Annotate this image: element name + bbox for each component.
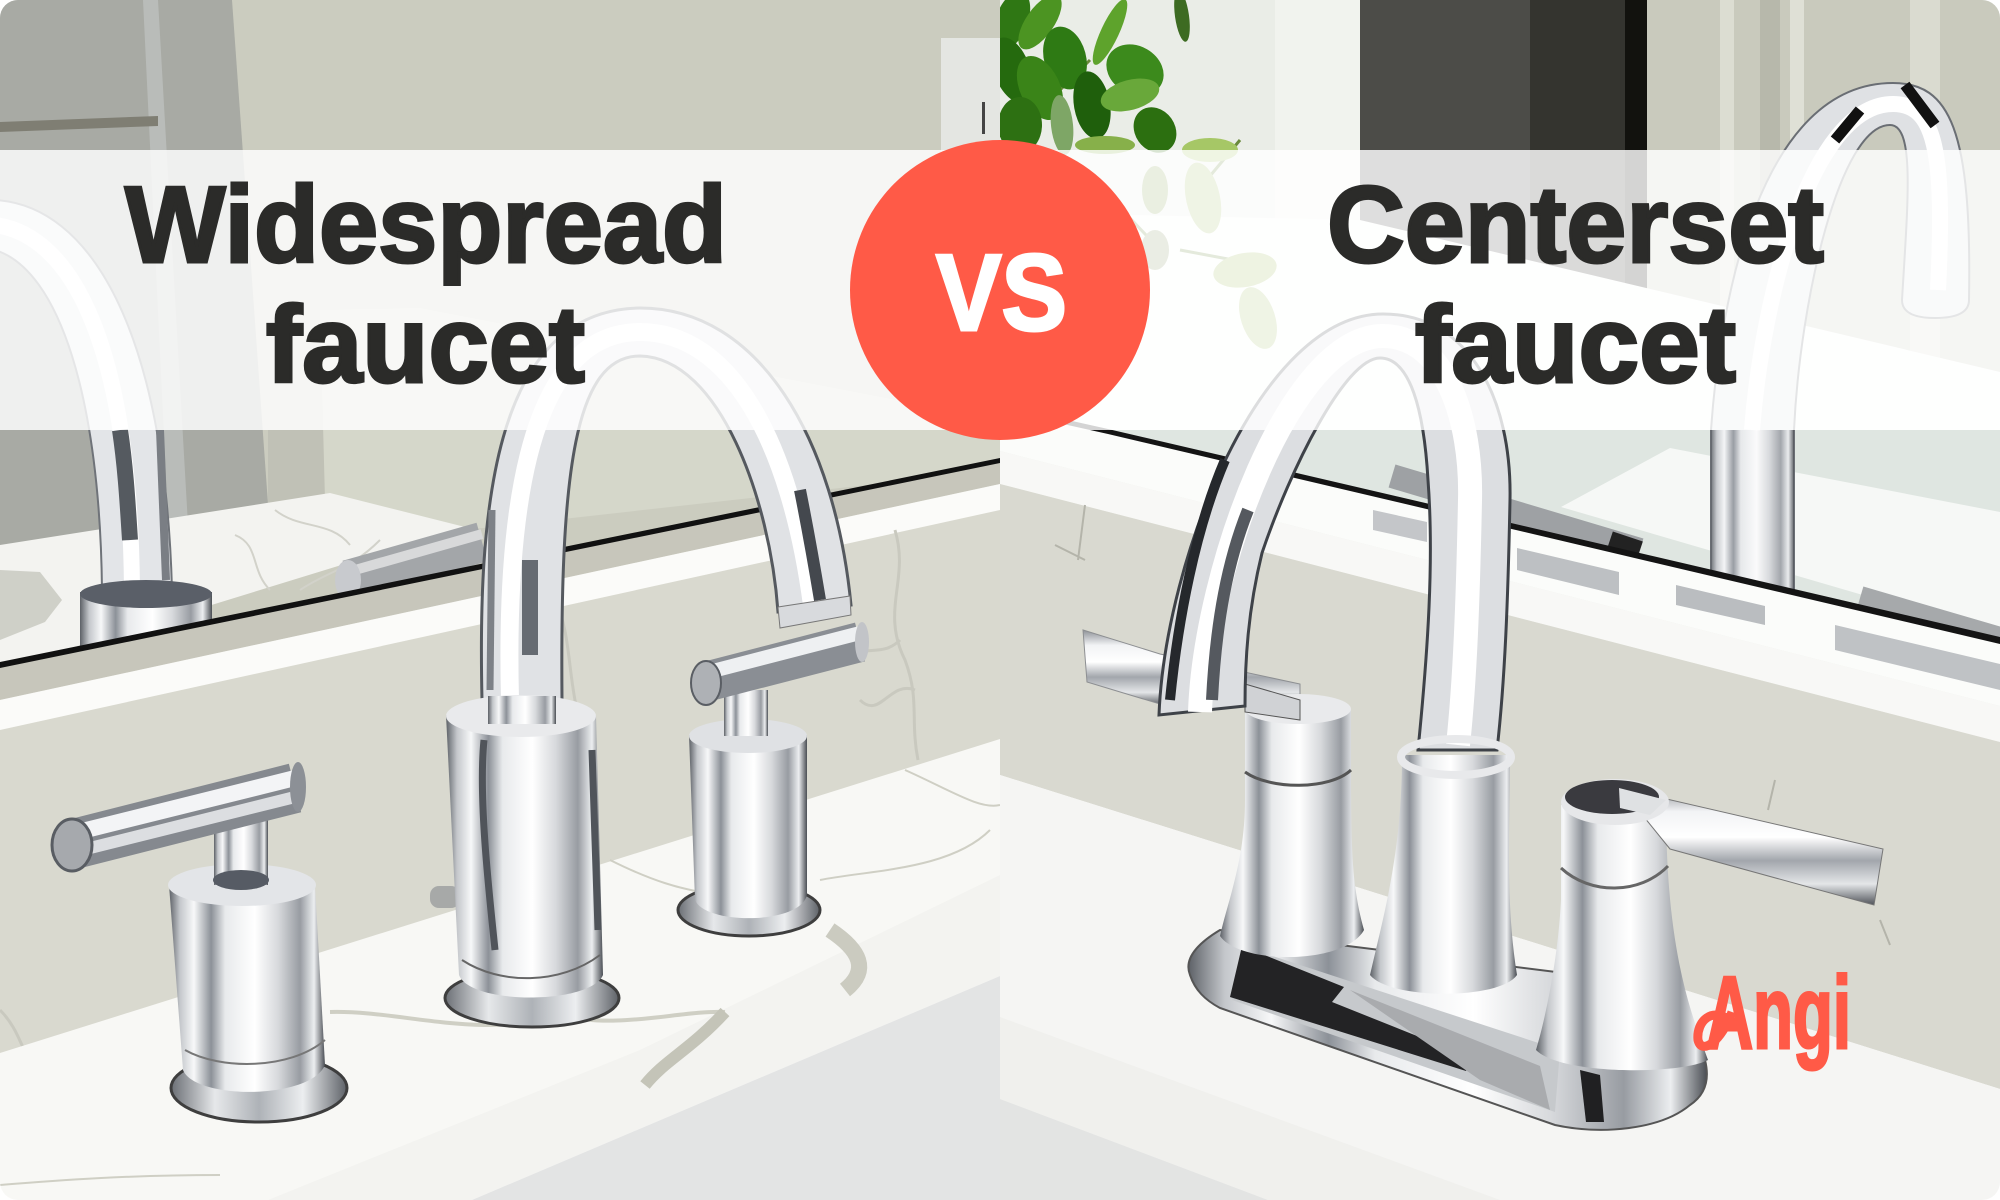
countertop [1000, 775, 2000, 1200]
cabinet below counter [472, 976, 1000, 1200]
spout arch [481, 308, 851, 700]
Angi logo [1698, 955, 1851, 1070]
mirror background wall [1000, 0, 1275, 150]
body top cap [446, 695, 596, 737]
backsplash top edge [0, 484, 1000, 730]
mirror frame [1000, 405, 2000, 706]
pop-up rod [430, 886, 456, 908]
door trim in mirror [0, 0, 272, 560]
left knob [1220, 709, 1364, 957]
left handle [52, 762, 347, 1122]
countertop marble veins [0, 770, 1000, 1185]
vertical trim [1275, 0, 1360, 300]
white counter edge [1000, 451, 2000, 742]
body cylinder [446, 715, 603, 998]
mirror reflection of spout [0, 200, 482, 652]
backsplash marble veins [0, 530, 918, 1057]
centerset faucet [1083, 314, 1883, 1130]
wall in mirror [0, 0, 1000, 720]
reflected counter surface [1360, 220, 2000, 420]
reflected sink basin [1113, 430, 2000, 604]
heading: widespread faucet [125, 164, 727, 406]
counter front face [1000, 1017, 1500, 1200]
counter front edge [268, 875, 1000, 1200]
backsplash flecks [1055, 505, 1890, 945]
heading: centerset faucet [1327, 164, 1824, 406]
Angi logo: Angi [1706, 955, 1851, 1070]
spout nozzle [778, 596, 851, 628]
marble countertop [0, 739, 1000, 1200]
backsplash [1000, 484, 2000, 1089]
heading: widespread faucet: Widespread [125, 164, 727, 286]
heading: widespread faucet: faucet [266, 284, 585, 406]
heading: centerset faucet: faucet [1415, 284, 1736, 406]
base plate [1188, 930, 1707, 1130]
center post [1370, 755, 1517, 994]
mirror reflection of spout and levers [1392, 83, 2000, 642]
spout highlights [1170, 336, 1470, 745]
right lever [1619, 788, 1883, 905]
spout highlights [486, 430, 826, 696]
right handle [678, 622, 869, 936]
heading: centerset faucet: Centerset [1327, 164, 1824, 286]
center faucet: spout and body [430, 308, 851, 1027]
photo panel: centerset faucet [983, 0, 2000, 1200]
striped wall in mirror [1647, 0, 2000, 194]
left lever [1083, 630, 1300, 706]
right knob [1536, 805, 1708, 1070]
base plate flat top [1232, 946, 1560, 1112]
electrical outlet plate [941, 38, 1000, 150]
spout arch [1159, 314, 1510, 750]
plant [983, 0, 1284, 354]
photo panel: widespread faucet [0, 0, 1011, 1200]
translucent title band [0, 150, 2000, 430]
collar [1401, 739, 1511, 775]
base ring [444, 978, 620, 1028]
knob top [1561, 779, 1669, 825]
mirror frame and bottom edge [0, 458, 1000, 670]
dark doorway [1360, 0, 1647, 300]
backsplash [0, 484, 1000, 1070]
cabinet below counter [1000, 1099, 1268, 1200]
vs badge [850, 140, 1150, 440]
reflected pale wall and counter [0, 430, 1000, 662]
vs badge: VS [936, 232, 1067, 354]
